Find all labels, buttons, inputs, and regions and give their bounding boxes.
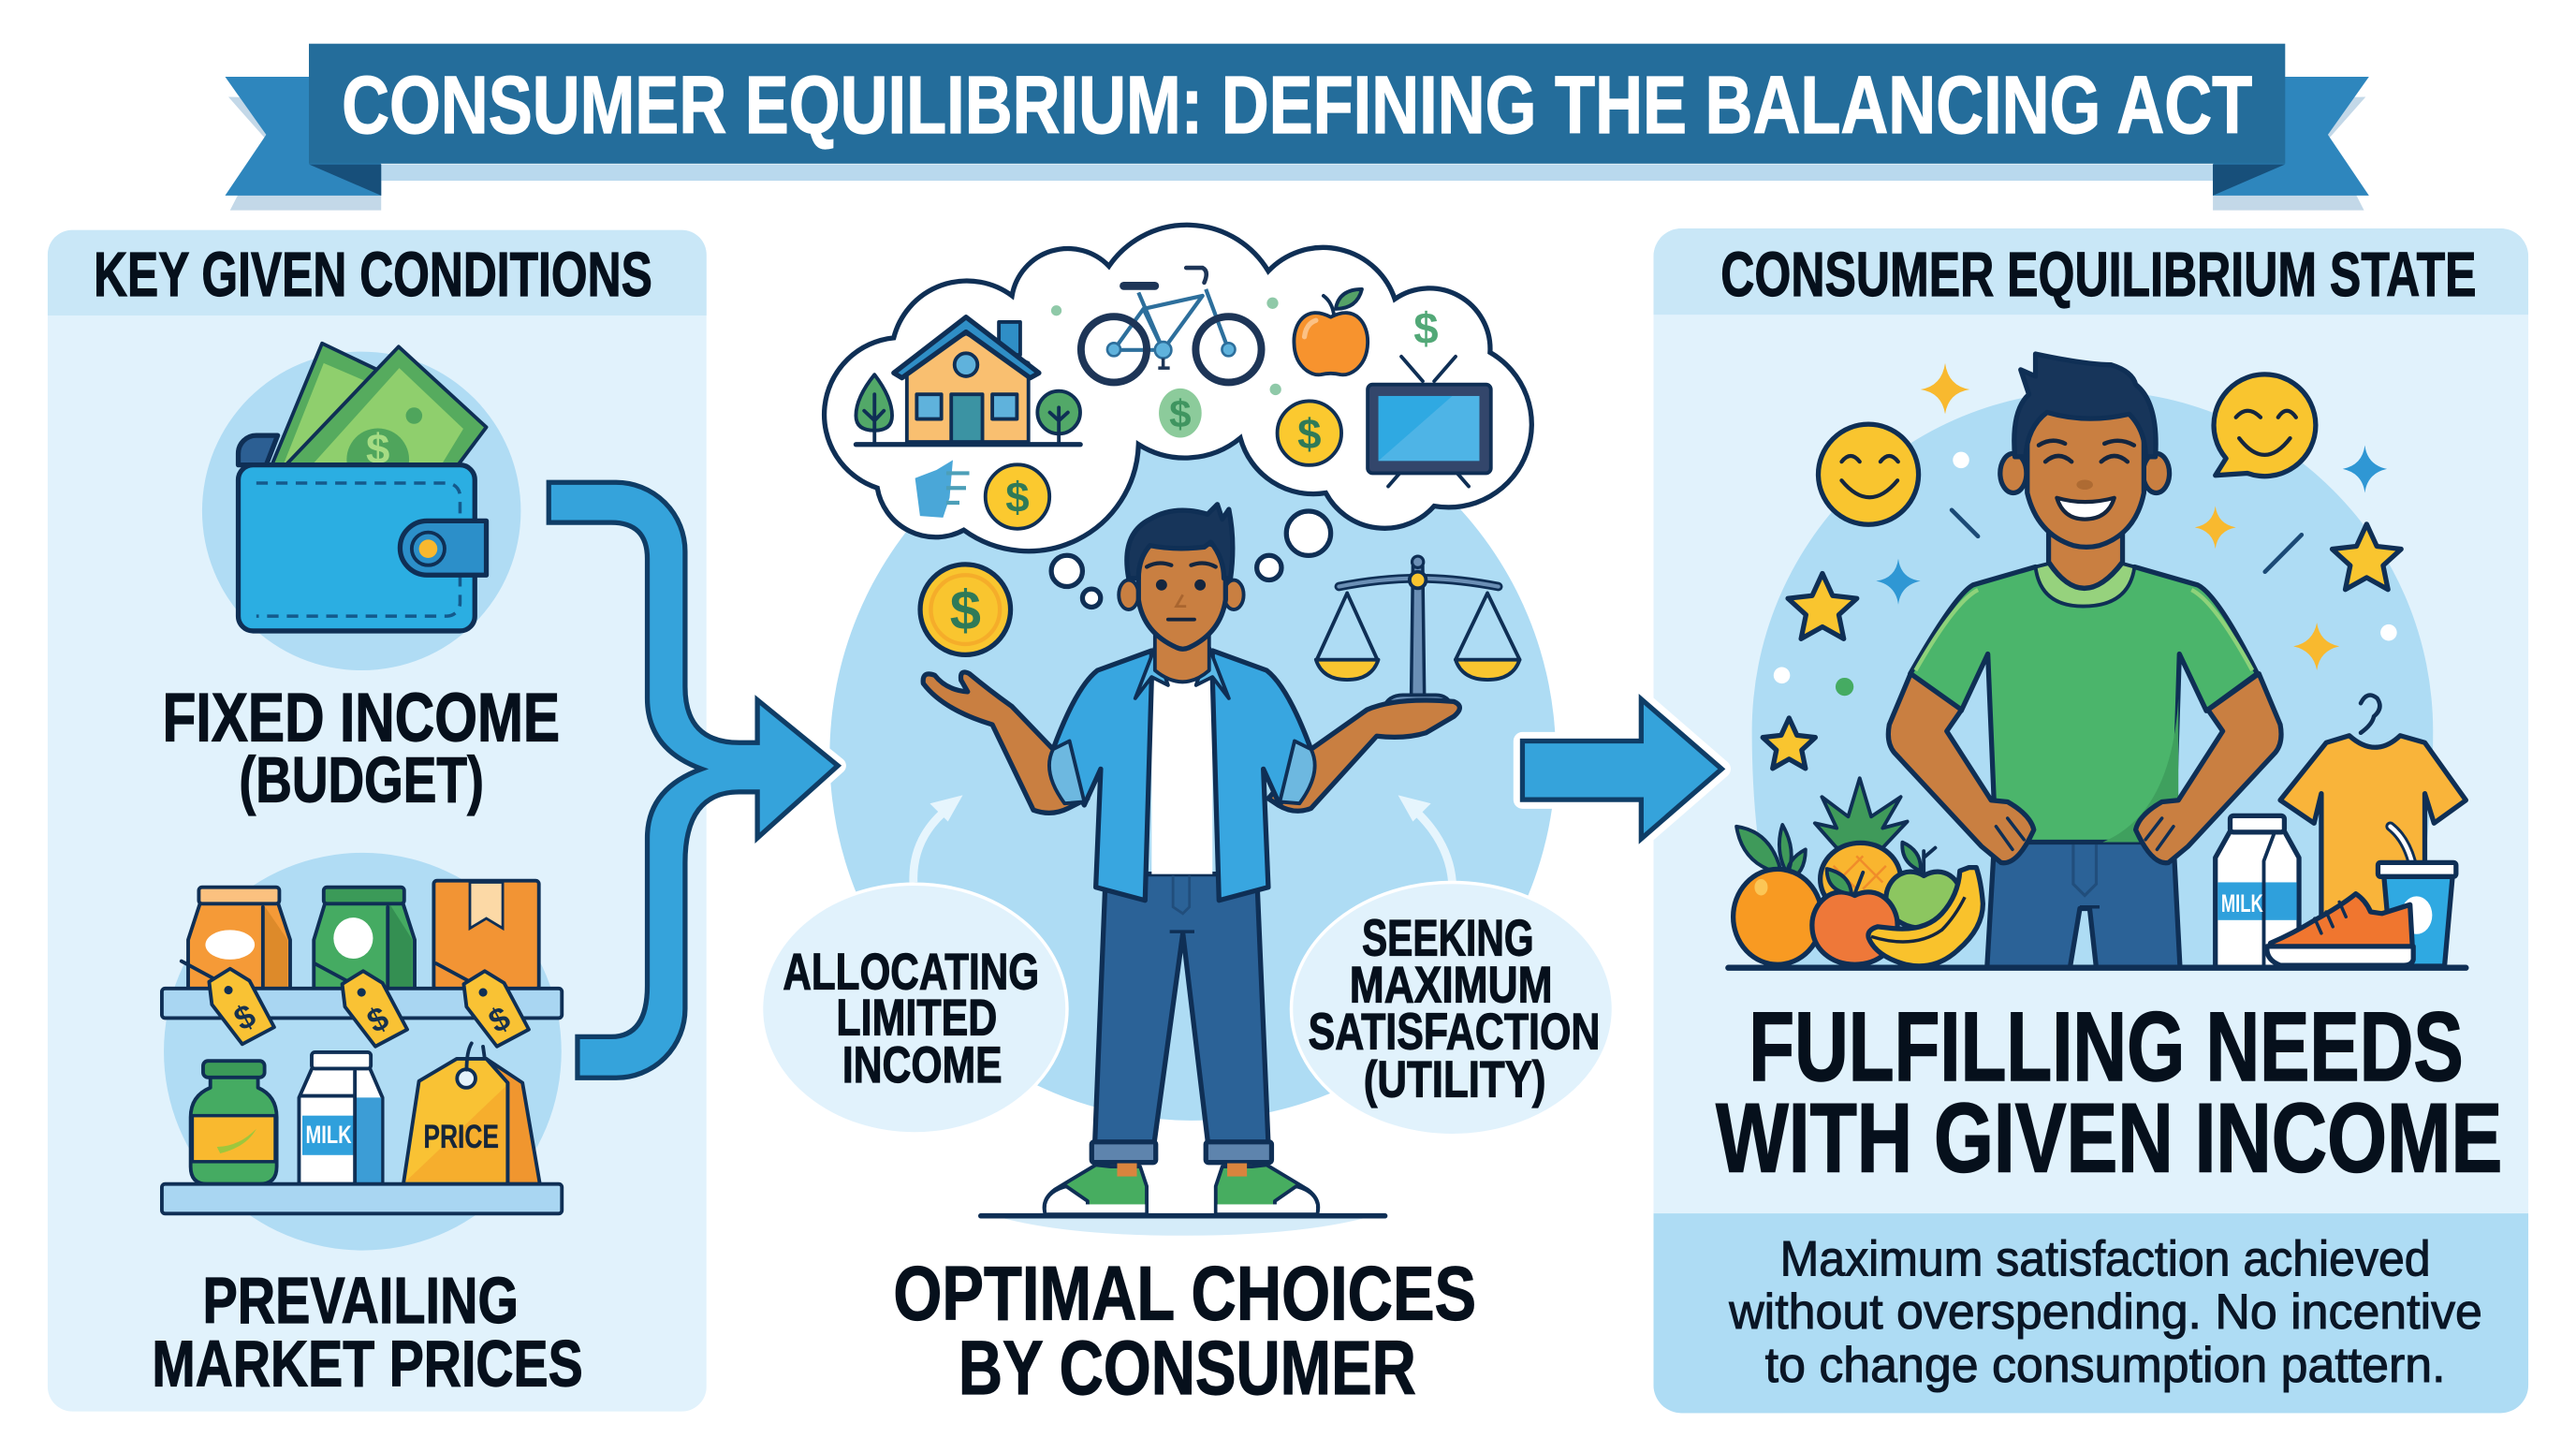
icon: bicycle xyxy=(1081,268,1262,382)
ground line xyxy=(981,1214,1385,1217)
green t-shirt body xyxy=(1910,566,2257,842)
box xyxy=(433,881,539,990)
head xyxy=(2000,354,2170,547)
orange xyxy=(1734,825,1822,964)
icon: wallet with cash: $ xyxy=(366,425,389,473)
milk carton: MILK xyxy=(305,1120,352,1149)
icon: coins and dollar marks xyxy=(986,298,1439,529)
icon: coins and dollar marks: $ xyxy=(1413,304,1439,354)
label: prevailing market prices: MARKET PRICES xyxy=(152,1328,583,1401)
thought bubbles xyxy=(1051,511,1331,607)
white flow arcs xyxy=(914,795,1453,882)
label: fixed income: FIXED INCOME xyxy=(162,679,560,756)
central backdrop circle xyxy=(829,391,1556,1236)
callout: allocating limited income xyxy=(762,884,1067,1134)
white t-shirt xyxy=(1151,666,1212,874)
sparkles xyxy=(1876,363,2387,670)
price tag 2: $ xyxy=(361,999,395,1040)
heading: optimal choices by consumer: BY CONSUMER xyxy=(959,1326,1416,1411)
callout: seeking maximum satisfaction: (UTILITY) xyxy=(1364,1050,1546,1108)
heading: optimal choices by consumer: OPTIMAL CHOICES xyxy=(893,1251,1476,1336)
icon: gold coin above hand: $ xyxy=(950,579,981,641)
jeans xyxy=(1987,842,2180,968)
icon: fruit basket group xyxy=(1734,778,1983,966)
icon: orange t-shirt on hanger xyxy=(2280,696,2466,968)
figure: satisfied consumer xyxy=(1888,354,2281,968)
label: fixed income: (BUDGET) xyxy=(239,743,484,815)
arrow: two conditions merging into consumer choice xyxy=(549,482,838,1078)
icon: wallet with cash xyxy=(202,344,520,670)
label: prevailing market prices xyxy=(152,1264,583,1401)
icon: blue smudge item xyxy=(915,460,970,518)
sneakers xyxy=(1045,1164,1318,1212)
green bag xyxy=(314,888,415,990)
thought cloud with desired goods xyxy=(825,225,1531,551)
title banner xyxy=(225,44,2369,211)
icon: coins and dollar marks: $ xyxy=(1005,474,1030,521)
label: fixed income xyxy=(162,679,560,815)
text block: explanation: Maximum satisfaction achieved xyxy=(1780,1231,2431,1286)
icon: coins and dollar marks: $ xyxy=(1297,410,1322,458)
callout: seeking maximum satisfaction xyxy=(1292,882,1613,1136)
callout: seeking maximum satisfaction: MAXIMUM xyxy=(1350,957,1553,1014)
panel: consumer equilibrium state xyxy=(1653,228,2528,1413)
icon: milk carton xyxy=(2216,815,2299,968)
orange bag xyxy=(188,888,290,990)
callout: allocating limited income: LIMITED xyxy=(836,990,997,1047)
icon: smiley speech bubble xyxy=(2214,374,2316,477)
shelf top xyxy=(162,989,562,1018)
green apple xyxy=(1886,843,1962,929)
trousers xyxy=(1091,874,1271,1163)
confetti dashes and dots xyxy=(1774,452,2397,696)
left forearm and hand xyxy=(923,672,1088,813)
heading: optimal choices by consumer xyxy=(893,1251,1476,1411)
callout: seeking maximum satisfaction: SATISFACTION xyxy=(1309,1003,1600,1060)
large price tag xyxy=(403,1043,540,1184)
open blue shirt xyxy=(1049,647,1315,901)
milk carton xyxy=(299,1052,383,1184)
panel: key given conditions xyxy=(48,230,707,1412)
right forearm and hand xyxy=(1268,700,1459,811)
neck and collar xyxy=(2036,526,2134,607)
label: prevailing market prices: PREVAILING xyxy=(202,1264,519,1337)
shelf bottom xyxy=(162,1184,562,1213)
text block: explanation: without overspending. No incentive xyxy=(1728,1284,2482,1340)
icon: milk carton: MILK xyxy=(2221,888,2263,917)
price tag 1: $ xyxy=(228,997,262,1038)
callout: seeking maximum satisfaction: SEEKING xyxy=(1362,910,1534,967)
heading: key given conditions: KEY GIVEN CONDITIONS xyxy=(94,241,652,310)
stars xyxy=(1763,524,2401,769)
icon: balance scale on hand xyxy=(1316,556,1519,708)
arms and hands xyxy=(1888,674,2281,863)
icon: running shoe xyxy=(2267,894,2413,965)
large price tag: PRICE xyxy=(423,1119,499,1155)
red apple xyxy=(1812,869,1897,964)
text block: explanation xyxy=(1728,1231,2482,1393)
icon: smiley face xyxy=(1819,424,1919,524)
callout: allocating limited income: INCOME xyxy=(842,1036,1003,1093)
head xyxy=(1119,505,1244,649)
neck xyxy=(1155,633,1209,682)
arrow: choices lead to equilibrium xyxy=(1522,699,1721,839)
callout: allocating limited income: ALLOCATING xyxy=(783,944,1039,1001)
icon: drink cup xyxy=(2378,827,2456,966)
jar xyxy=(191,1061,277,1184)
icon: coins and dollar marks: $ xyxy=(1169,391,1192,435)
icon: market shelves with priced goods xyxy=(162,853,562,1251)
figure: thinking consumer xyxy=(923,505,1459,1216)
icon: gold coin above hand xyxy=(920,565,1011,654)
icon: apple xyxy=(1294,289,1368,374)
pineapple xyxy=(1815,778,1908,916)
satisfaction backdrop xyxy=(1752,390,2433,968)
ground line xyxy=(1728,966,2466,970)
text block: explanation: to change consumption pattern. xyxy=(1765,1338,2446,1393)
price tag 3: $ xyxy=(483,999,517,1040)
icon: house xyxy=(856,317,1080,445)
price tag 2 xyxy=(315,940,407,1053)
heading: fulfilling needs with given income xyxy=(1716,992,2502,1193)
banana xyxy=(1868,868,1983,966)
price tag 1 xyxy=(182,937,274,1051)
icon: television xyxy=(1368,357,1491,486)
price tag 3 xyxy=(436,940,529,1053)
